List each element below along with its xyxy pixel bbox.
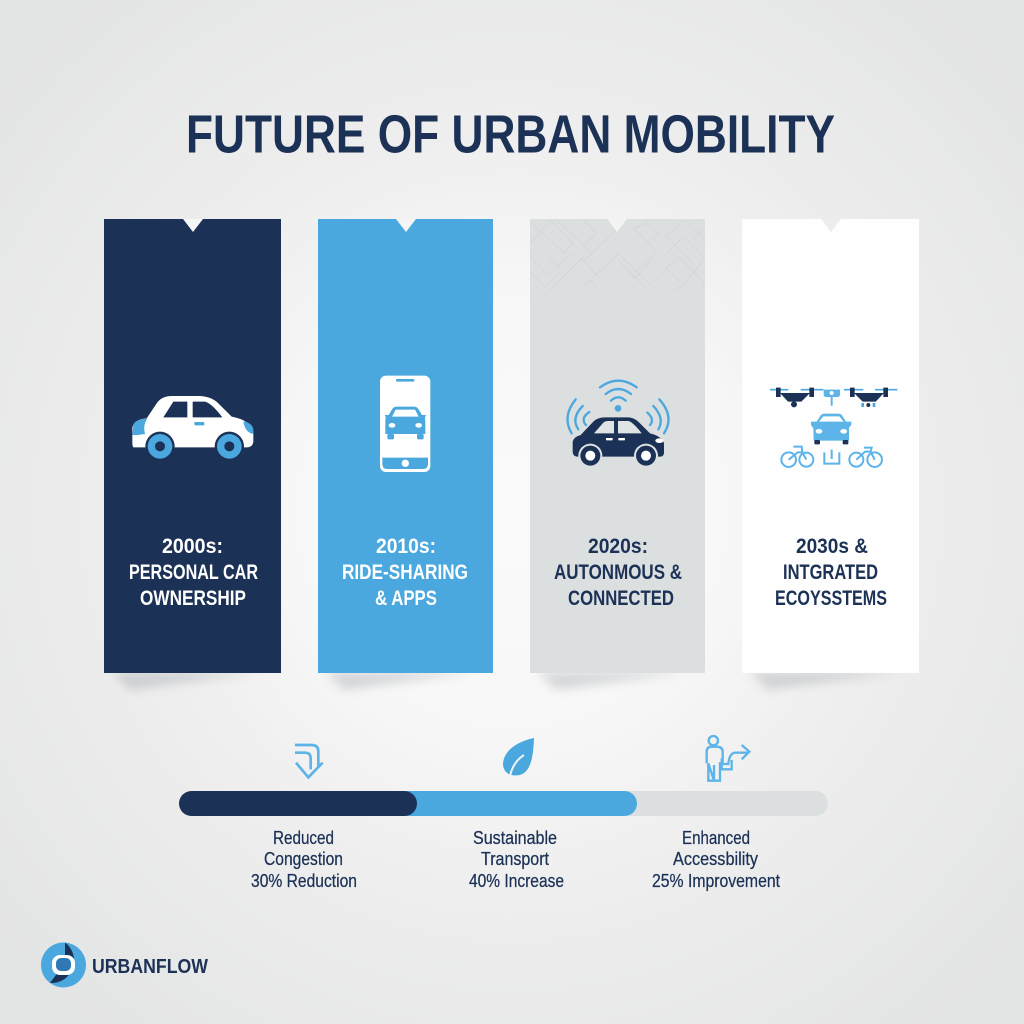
icon: reduced congestion arrow	[295, 745, 323, 777]
label: 2000s: PERSONAL CAR	[129, 561, 258, 584]
text: sustainable transport	[469, 828, 564, 891]
logo: urbanflow	[41, 942, 208, 988]
text: reduced congestion: 30% Reduction	[251, 871, 357, 891]
label: 2010s: & APPS	[375, 587, 437, 610]
progress bar	[179, 791, 828, 816]
panel: 2030s	[742, 219, 919, 673]
notch	[821, 219, 841, 232]
label: 2030s	[775, 535, 887, 610]
label: 2030s: 2030s &	[796, 535, 868, 558]
text: sustainable transport: 40% Increase	[469, 871, 564, 891]
label: 2010s: RIDE-SHARING	[342, 561, 468, 584]
panel: 2020s	[530, 219, 705, 673]
text: sustainable transport: Sustainable	[473, 828, 557, 848]
label: 2020s	[554, 535, 682, 610]
text: reduced congestion: Reduced	[273, 828, 334, 848]
label: 2010s	[342, 535, 468, 610]
label: 2010s: 2010s:	[376, 535, 436, 558]
label: 2020s: 2020s:	[588, 535, 648, 558]
label: 2000s: 2000s:	[162, 535, 223, 558]
label: 2030s: INTGRATED	[783, 561, 878, 584]
label: 2000s	[129, 535, 258, 610]
panel: 2010s	[318, 219, 493, 673]
text: reduced congestion	[251, 828, 357, 891]
label: 2020s: AUTONMOUS &	[554, 561, 682, 584]
text: enhanced accessibility	[652, 828, 780, 891]
icon: personal car	[132, 396, 253, 461]
street grid pattern	[530, 220, 705, 300]
icon: leaf	[503, 738, 534, 776]
label: 2020s: CONNECTED	[568, 587, 674, 610]
panel: 2000s	[104, 219, 281, 673]
title: FUTURE OF URBAN MOBILITY	[186, 104, 835, 164]
notch	[396, 219, 416, 232]
text: reduced congestion: Congestion	[264, 849, 343, 869]
text: enhanced accessibility: Accessbility	[673, 849, 758, 869]
icon: integrated ecosystem	[770, 388, 897, 467]
label: 2000s: OWNERSHIP	[140, 587, 246, 610]
wordmark: URBANFLOW	[92, 956, 208, 978]
card shadows	[112, 672, 900, 690]
notch	[183, 219, 203, 232]
icon: connected car	[567, 381, 669, 468]
icon: phone with car	[380, 376, 430, 472]
icon: person with arrow	[707, 736, 749, 781]
text: sustainable transport: Transport	[481, 849, 549, 869]
text: enhanced accessibility: Enhanced	[682, 828, 750, 848]
notch	[607, 219, 627, 232]
text: enhanced accessibility: 25% Improvement	[652, 871, 780, 891]
label: 2030s: ECOYSSTEMS	[775, 587, 887, 610]
